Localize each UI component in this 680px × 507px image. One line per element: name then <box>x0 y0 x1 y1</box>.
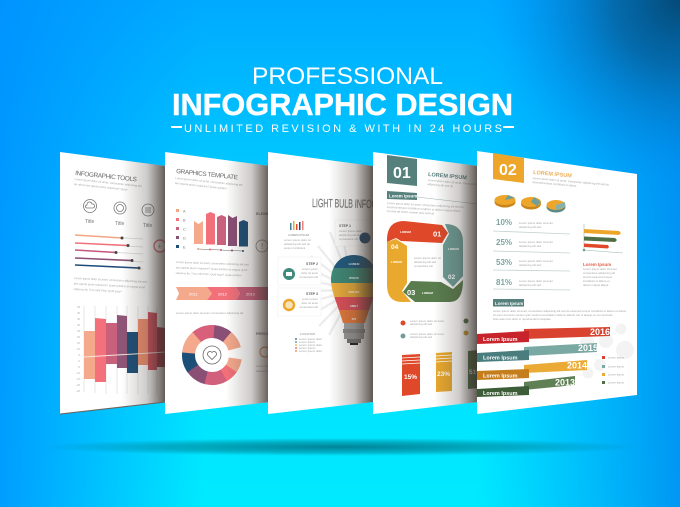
legend: D <box>183 236 186 240</box>
heart icon <box>203 346 221 364</box>
percentage rows: 10% <box>496 218 512 227</box>
step 2 card: dolor sit amet <box>301 271 318 275</box>
step 1 card: STEP 1 <box>339 224 351 228</box>
legend: C <box>183 228 186 232</box>
title line: professional: PROFESSIONAL <box>252 63 443 90</box>
legend dots <box>400 318 468 339</box>
section heading: eiusmod tempor incididunt ut labore <box>532 180 577 188</box>
cycle diagram <box>387 221 463 302</box>
number box 01: 01 <box>393 165 411 182</box>
bar chart: 30 <box>77 323 81 327</box>
icon titles: Title <box>115 221 124 227</box>
section heading: Lorem ipsum dolor sit amet, consectetur adipiscing elit sed do <box>532 176 609 187</box>
floor shadow <box>40 438 640 456</box>
panel: page 4 section 01 <box>373 152 482 414</box>
step 3 card: Lorem ipsum <box>302 297 319 301</box>
side element note: ! <box>261 242 263 251</box>
mini bar icon with text: LOREM IPSUM <box>288 233 310 237</box>
cycle diagram: 02 <box>448 274 456 281</box>
percentage note: adipiscing <box>256 369 269 373</box>
cycle diagram: LOREM <box>391 260 402 264</box>
bar chart: -10 <box>76 371 81 375</box>
legend dots: adipiscing elit sed <box>410 322 433 326</box>
icons with titles <box>84 200 154 216</box>
location list: Lorem ipsum dolor <box>299 349 322 353</box>
step 1 card: consectetur elit <box>339 237 358 241</box>
year ribbon 2016: Lorem Ipsum <box>483 337 518 343</box>
subtitle with dashes: UNLIMITED REVISION & WITH IN 24 HOURS <box>184 123 502 135</box>
side paragraph: Lorem Ipsum <box>583 262 611 267</box>
paragraph: videmus ile, Tum mihi Piso: Quid ergo? Quae quidem <box>176 271 242 277</box>
cycle diagram: LOREM <box>400 230 411 234</box>
percentage rows: Lorem ipsum dolor sit amet <box>519 279 553 283</box>
bar chart: 45 <box>77 305 81 309</box>
paragraph: Ut enim ad minim veniam quis nostrud exercitation ullamco laboris nisi ut aliquip ex ea commodo <box>493 313 613 317</box>
panel: page 5 section 02 <box>477 151 637 414</box>
paragraph: eiusmod tempor incididunt ut labore et dolore magna aliqua <box>387 205 461 213</box>
light bulb: DOLOR <box>349 290 360 294</box>
page 1 heading: INFOGRAPHIC TOOLS <box>75 170 137 183</box>
icon titles: Title <box>85 219 94 225</box>
pie charts <box>494 195 566 212</box>
cycle diagram: LOREM <box>448 247 459 251</box>
icon titles: Title <box>143 223 152 229</box>
bar chart <box>76 305 166 394</box>
step 3 card: STEP 3 <box>306 292 318 296</box>
cycle diagram: Lorem ipsum dolor sit <box>414 256 441 260</box>
year ribbon 2014 <box>477 360 587 380</box>
year ribbon: 2011 <box>189 292 198 296</box>
page 2 heading: GRAPHICS TEMPLATE <box>176 168 238 181</box>
percentage bars: 51% <box>469 369 482 376</box>
bar chart: -25 <box>76 389 81 393</box>
bar chart: 15 <box>77 341 81 345</box>
percentage rows: adipiscing elit sed <box>519 283 542 287</box>
legend dots: Lorem ipsum dolor sit amet <box>410 319 444 323</box>
section heading: LOREM IPSUM <box>533 170 572 179</box>
light bulb: IPSUM <box>349 276 359 280</box>
bar chart: 0 <box>79 359 81 363</box>
number box 02 <box>493 153 524 183</box>
page 1 heading: de rebus tam aperta pluris requirere? Quae <box>74 182 128 192</box>
percentage rows: 25% <box>496 238 512 247</box>
paragraph <box>176 260 249 278</box>
percentage bars <box>402 350 482 396</box>
year ribbon: 2013 <box>246 292 256 296</box>
percentage rows: 81% <box>496 278 512 287</box>
side paragraph <box>583 262 617 287</box>
paragraph: tam aperta pluris requirere? Quae quidem at magna quod <box>176 265 248 272</box>
percentage note: PERCENT <box>256 332 275 336</box>
side element note <box>256 212 268 252</box>
paragraph: Lorem ipsum dolor sit amet, consectetur adipiscing elit sed do <box>387 201 464 209</box>
location list: Lorem ipsum <box>299 346 316 350</box>
step 1 card: adipiscing elit sed <box>339 233 362 237</box>
side element note: ELEMENT <box>256 212 275 216</box>
ribbon legend: Lorem ipsum <box>608 356 625 360</box>
bar chart: 25 <box>77 329 81 333</box>
percentage rows <box>493 218 570 290</box>
side paragraph: dolore magna aliqua <box>583 283 609 287</box>
side paragraph: Lorem ipsum dolor sit amet <box>583 267 617 271</box>
bar chart: 10 <box>77 347 81 351</box>
legend dots: Lorem ipsum dolor sit amet <box>410 332 444 336</box>
cycle diagram: 01 <box>433 230 441 238</box>
line of text: Lorem ipsum dolor sit amet, consectetur adipiscing elit <box>176 311 244 315</box>
step 2 card <box>278 257 321 285</box>
year ribbon: 2012 <box>218 292 228 296</box>
percentage bars: 15% <box>404 374 417 381</box>
plus badge <box>154 240 166 252</box>
panel: page 1 infographic tools <box>60 152 166 414</box>
bar chart: -15 <box>76 377 81 381</box>
year ribbon 2016 <box>477 327 610 344</box>
paragraph <box>493 309 627 321</box>
gears decoration <box>580 324 634 378</box>
step 3 card: consectetur elit <box>299 305 318 309</box>
heading block <box>171 63 514 135</box>
cycle diagram: adipiscing elit sed <box>414 260 437 264</box>
year ribbon 2015 <box>477 343 598 362</box>
title line: infographic design: INFOGRAPHIC DESIGN <box>172 88 513 122</box>
page 2 heading <box>175 168 242 190</box>
paragraph: Lorem ipsum dolor sit amet, consectetur adipiscing elit sed do eiusmod tempor incididunt ut labore et dolore <box>493 309 627 313</box>
paragraph: Lorem ipsum dolor sit amet, consectetur adipiscing elit sed <box>176 260 249 267</box>
legend: A <box>183 210 186 214</box>
paragraph <box>386 202 464 214</box>
step 1 card <box>335 220 373 246</box>
page 1 heading: Lorem ipsum dolor sit amet, consectetur adipiscing elit <box>74 177 142 188</box>
bar chart: -20 <box>76 383 81 387</box>
horizontal bar chart <box>583 224 623 253</box>
ribbon legend: Lorem ipsum <box>608 380 625 384</box>
percentage rows: Lorem ipsum dolor sit amet <box>519 259 553 263</box>
year ribbon 2014: Lorem Ipsum <box>483 374 518 380</box>
year ribbon 2015: Lorem Ipsum <box>483 356 518 362</box>
paragraph: tam aperta pluris requirere? Quae quidem at magna quod <box>74 281 146 289</box>
light bulb <box>331 255 373 345</box>
ribbon legend: Lorem ipsum <box>608 364 625 368</box>
page 2 heading: tam aperta pluris requirere? Quae quidem <box>175 181 227 190</box>
side paragraph: sed do eiusmod tempor <box>583 275 612 279</box>
section heading <box>532 170 610 191</box>
percentage rows: 53% <box>496 258 512 267</box>
location list: Lorem ipsum dolor <box>299 337 322 341</box>
bar chart: -5 <box>78 365 81 369</box>
page 3 heading: LIGHT BULB INFOG <box>312 196 377 211</box>
cycle diagram: 03 <box>407 288 415 297</box>
legend dots: adipiscing elit sed <box>410 335 433 339</box>
number box 01 <box>387 155 417 186</box>
bar chart: 35 <box>77 317 81 321</box>
tag label <box>387 191 478 204</box>
panel: page 2 graphics template <box>165 152 275 414</box>
mini bar icon with text: Lorem ipsum dolor sit <box>284 238 311 242</box>
section heading <box>427 172 477 188</box>
paragraph: videmus ile, Tum mihi Piso: Quid ergo? <box>73 287 122 294</box>
plus badge: + <box>158 244 162 250</box>
arrow bar chart <box>194 212 248 252</box>
sun rays <box>310 232 348 336</box>
legend <box>176 209 186 250</box>
year ribbon <box>176 287 270 300</box>
side paragraph: incididunt ut labore et <box>583 279 610 283</box>
mini bar icon with text <box>284 221 311 250</box>
year ribbon 2013: Lorem Ipsum <box>483 391 518 397</box>
step 2 card: Lorem ipsum <box>302 267 319 271</box>
light bulb: LOREM <box>349 262 360 266</box>
cycle diagram: LOREM <box>422 291 433 295</box>
section heading: LOREM IPSUM <box>428 172 467 181</box>
progress bars <box>75 235 143 270</box>
tag label <box>493 299 524 306</box>
step 3 card <box>278 288 321 316</box>
mini bar icon with text: tempor incididunt <box>284 246 306 250</box>
bar chart: 5 <box>79 353 81 357</box>
step 3 card: dolor sit amet <box>301 301 318 305</box>
side paragraph: consectetur adipiscing elit <box>583 271 615 275</box>
percentage rows: adipiscing elit sed <box>519 225 542 229</box>
location list <box>295 332 322 353</box>
paragraph: Duis aute irure dolor in reprehenderit voluptate <box>493 317 551 321</box>
light bulb: SIT <box>352 317 356 321</box>
location list: Lorem ipsum dolor <box>299 343 322 347</box>
percentage bars: 23% <box>437 371 450 378</box>
year ribbon 2016: 2016 <box>590 327 610 337</box>
year ribbon 2013: 2013 <box>555 378 575 388</box>
paragraph: Lorem ipsum dolor sit amet, consectetur adipiscing elit sed <box>74 276 147 284</box>
paragraph: Ut enim ad minim veniam quis nostrud <box>387 209 435 216</box>
percentage rows: adipiscing elit sed <box>519 263 542 267</box>
number box 02: 02 <box>499 162 517 179</box>
tag label: Lorem Ipsum <box>389 194 417 198</box>
page 2 heading: Lorem ipsum dolor sit amet, consectetur adipiscing elit <box>175 176 243 187</box>
panel: page 3 light bulb <box>268 152 373 414</box>
paragraph <box>74 277 146 293</box>
icon titles <box>85 219 152 227</box>
bar chart: 20 <box>77 335 81 339</box>
location list: Lorem ipsum <box>299 340 316 344</box>
year ribbon 2014: 2014 <box>567 360 587 370</box>
percentage rows: Lorem ipsum dolor sit amet <box>519 221 553 225</box>
ribbon legend <box>602 356 625 384</box>
page 1 heading <box>74 170 142 190</box>
location list: LOCATION <box>300 332 315 336</box>
mini bar icon with text: adipiscing elit sed do <box>284 242 310 246</box>
cycle diagram: consectetur elit <box>414 264 433 268</box>
section heading: adipiscing elit sed do <box>427 182 454 188</box>
donut chart <box>182 325 242 386</box>
legend: B <box>183 218 186 222</box>
cycle diagram: 04 <box>391 244 399 251</box>
percentage rows: adipiscing elit sed <box>519 244 542 248</box>
section heading: Lorem ipsum dolor sit amet, consectetur <box>427 178 477 186</box>
year ribbon 2013 <box>477 376 575 397</box>
bar chart: 40 <box>77 311 81 315</box>
percentage rows: Lorem ipsum dolor sit amet <box>519 240 553 244</box>
legend: E <box>183 246 186 250</box>
step 2 card: STEP 2 <box>306 262 318 266</box>
light bulb: AMET <box>350 304 358 308</box>
percentage note <box>256 332 268 372</box>
step 1 card: Lorem ipsum dolor <box>339 229 362 233</box>
percentage note: Lorem ipsum <box>256 364 273 368</box>
ribbon legend: Lorem ipsum <box>608 372 625 376</box>
year ribbon 2015: 2015 <box>578 343 598 353</box>
tag label: Lorem Ipsum <box>495 301 523 306</box>
step 2 card: consectetur elit <box>299 275 318 279</box>
